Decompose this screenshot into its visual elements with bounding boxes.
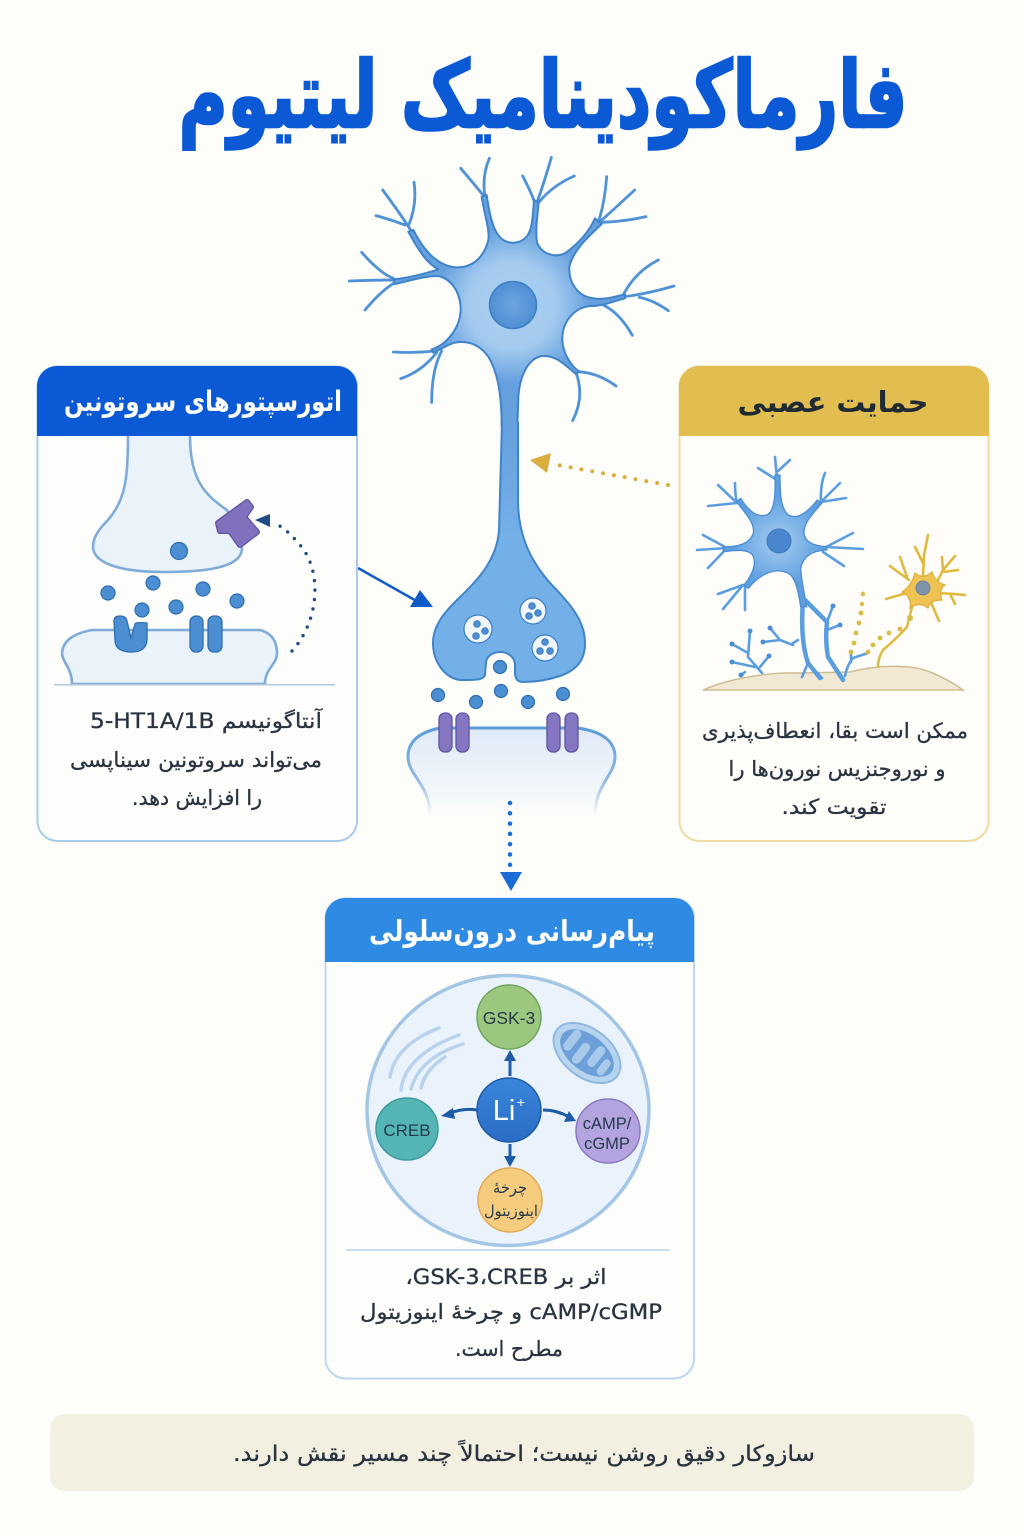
- panel text: [702, 719, 968, 819]
- panel text: مطرح است.: [455, 1337, 563, 1361]
- mitochondrion: [542, 1011, 632, 1095]
- node: lithium ion: Li: [493, 1095, 515, 1127]
- node: GSK-3: GSK-3: [483, 1008, 535, 1028]
- central neuron: [349, 157, 674, 815]
- axon and terminal: [433, 422, 585, 682]
- panel text: تقویت کند.: [782, 795, 887, 819]
- endoplasmic reticulum: [390, 1028, 463, 1090]
- postsynaptic membrane: [408, 728, 615, 815]
- panel text: را افزایش دهد.: [132, 786, 262, 810]
- node: cAMP/cGMP: cAMP/: [583, 1115, 632, 1133]
- node: lithium ion: +: [517, 1094, 525, 1110]
- divider: [54, 684, 335, 686]
- footer note: سازوکار دقیق روشن نیست؛ احتمالاً چند مسیر نقش دارند.: [233, 1439, 815, 1467]
- postsynaptic receptors: [439, 713, 578, 752]
- blue neuron: [697, 457, 868, 680]
- yellow neuron: [878, 535, 965, 667]
- cell diagram: [367, 976, 649, 1246]
- node: CREB: CREB: [383, 1121, 431, 1140]
- panel text: می‌تواند سروتونین سیناپسی: [70, 748, 322, 772]
- neuron nucleus: [490, 282, 536, 328]
- blue neuron soma: [723, 475, 827, 607]
- panel header: [37, 366, 357, 436]
- panel: intracellular signaling: [325, 898, 694, 1378]
- neuron dendrites and soma: [349, 157, 674, 427]
- arrows from lithium: [451, 1060, 569, 1157]
- panel header: اتورسپتورهای سروتونین: [64, 385, 342, 418]
- panel header: [325, 898, 694, 962]
- synaptic vesicles: [464, 598, 558, 661]
- panel: neural support: [679, 366, 989, 841]
- gold dots: [849, 592, 913, 654]
- panel: serotonin autoreceptors: [37, 366, 357, 841]
- panel text: آنتاگونیسم ‎5-HT1A/1B: [90, 708, 323, 734]
- node: CREB: [376, 1098, 438, 1160]
- illustration: neurons on ground: [697, 457, 965, 690]
- node: inositol cycle: اینوزیتول: [484, 1202, 538, 1220]
- neurotransmitter dots: [432, 660, 570, 708]
- arrow: neural support to axon: [530, 453, 668, 485]
- node: lithium ion: [477, 1078, 541, 1142]
- panel header: حمایت عصبی: [738, 385, 928, 419]
- panel header: پیام‌رسانی درون‌سلولی: [369, 914, 655, 949]
- dotted feedback arrow: [255, 514, 315, 651]
- node: inositol cycle: چرخهٔ: [493, 1178, 527, 1198]
- panel text: [70, 708, 323, 810]
- node: inositol cycle: [478, 1168, 542, 1232]
- node: GSK-3: [477, 985, 541, 1049]
- node: cAMP/cGMP: [576, 1099, 640, 1163]
- panel text: ممکن است بقا، انعطاف‌پذیری: [702, 719, 968, 743]
- synapse illustration: [62, 436, 277, 684]
- footer note: [50, 1414, 974, 1491]
- arrow: receptors to synapse: [358, 568, 433, 607]
- divider: [346, 1249, 670, 1251]
- panel text: cAMP/cGMP و چرخهٔ اینوزیتول: [360, 1300, 662, 1324]
- blue neuron nucleus: [767, 529, 791, 553]
- node: cAMP/cGMP: cGMP: [584, 1135, 630, 1153]
- panel text: و نوروجنزیس نورون‌ها را: [728, 757, 946, 781]
- ground: [703, 666, 963, 690]
- cell membrane: [367, 976, 649, 1246]
- panel text: [360, 1265, 662, 1361]
- panel header: [679, 366, 989, 436]
- panel text: اثر بر GSK-3،CREB،: [406, 1265, 606, 1289]
- arrow: synapse to signaling: [500, 803, 522, 891]
